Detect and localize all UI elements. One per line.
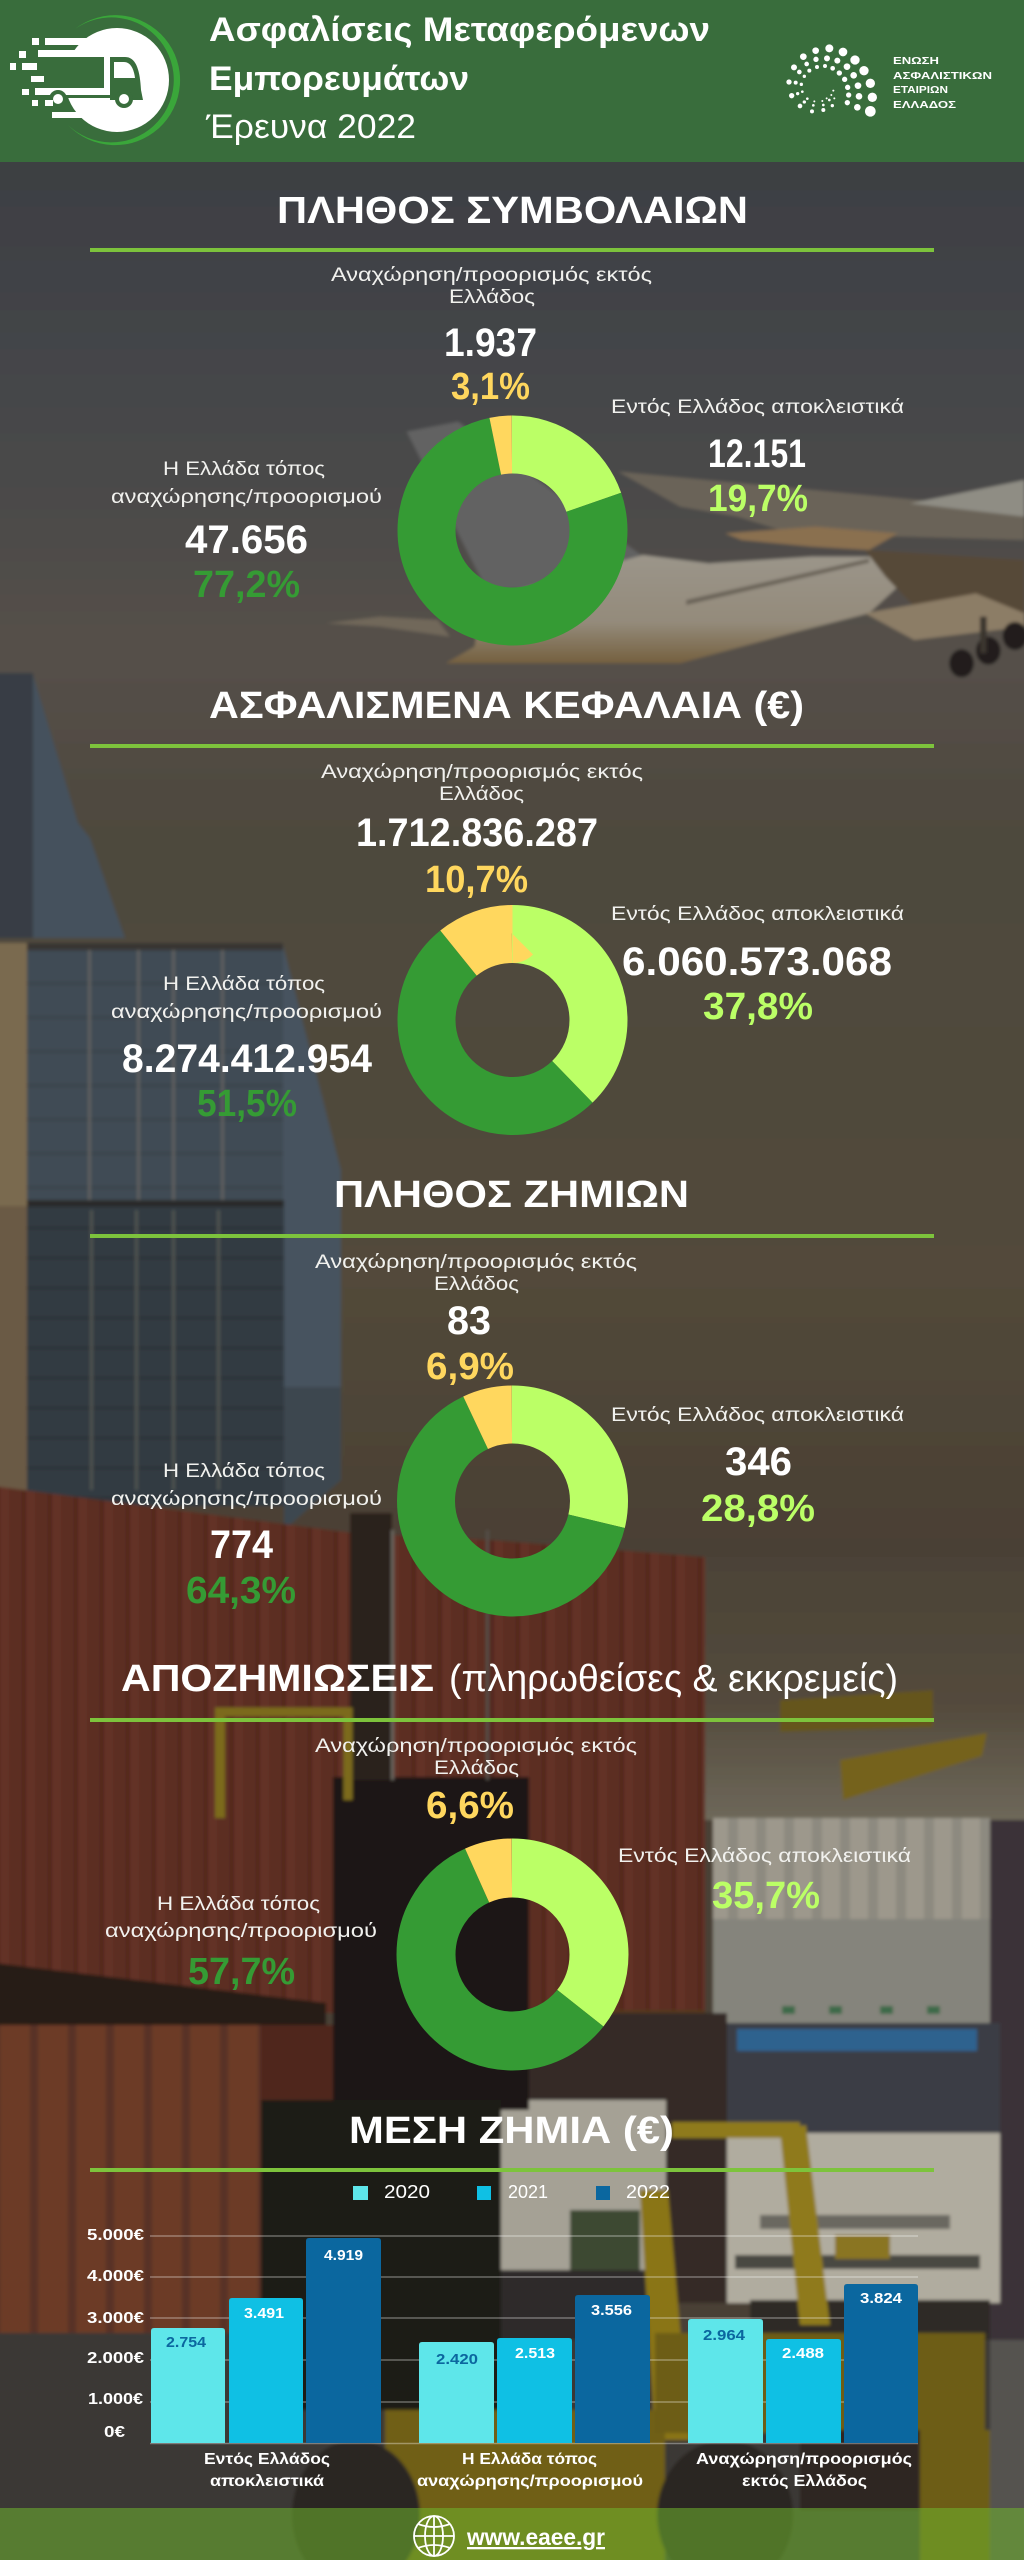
- label: Greece origin or destination: 774: [210, 1523, 274, 1567]
- header band: [0, 0, 1024, 162]
- label: Greece origin or destination: αναχώρησης/προορισμού: [111, 1002, 382, 1023]
- bars: Greece origin or destination: 2.513: [515, 2345, 555, 2362]
- label: outside Greece: 1.712.836.287: [356, 811, 598, 855]
- logo: ΕΑΕΕ dots and name: ΕΝΩΣΗ: [893, 56, 939, 67]
- label: Greece origin or destination: [111, 974, 382, 1125]
- heading: ΑΠΟΖΗΜΙΩΣΕΙΣ: [121, 1658, 434, 1700]
- label: Greece origin or destination: αναχώρησης/προορισμού: [111, 1489, 382, 1510]
- bars: outside Greece: 2.488: [782, 2345, 824, 2362]
- label: within Greece: [611, 397, 904, 520]
- bars: within Greece: 4.919: [324, 2247, 363, 2264]
- x axis labels: εκτός Ελλάδος: [742, 2473, 867, 2490]
- title: Ασφαλίσεις Μεταφερόμενων: [209, 11, 710, 49]
- bars: within Greece: 2.754: [166, 2334, 207, 2351]
- label: outside Greece: 10,7%: [425, 859, 528, 901]
- label: outside Greece: Αναχώρηση/προορισμός εκτός: [315, 1736, 637, 1757]
- second truck behind forklift: [496, 2100, 666, 2270]
- bar chart: [87, 2227, 918, 2490]
- bars: outside Greece: [688, 2284, 918, 2443]
- legend: [353, 2182, 670, 2202]
- website link: www.eaee.gr: [466, 2524, 605, 2550]
- logo: ΕΑΕΕ dots and name: ΕΤΑΙΡΙΩΝ: [893, 85, 948, 96]
- label: within Greece: 12.151: [708, 432, 806, 476]
- label: Greece origin or destination: Η Ελλάδα τόπος: [163, 974, 325, 995]
- label: within Greece: [611, 904, 904, 1028]
- label: outside Greece: [315, 1736, 637, 1827]
- label: within Greece: 37,8%: [703, 986, 813, 1028]
- heading: ΑΣΦΑΛΙΣΜΕΝΑ ΚΕΦΑΛΑΙΑ (€): [209, 685, 804, 727]
- donut chart: [426, 934, 598, 1106]
- label: within Greece: 19,7%: [708, 478, 808, 520]
- panel: ΑΣΦΑΛΙΣΜΕΝΑ ΚΕΦΑΛΑΙΑ: [90, 685, 934, 1125]
- label: outside Greece: 83: [447, 1299, 491, 1343]
- x axis labels: Εντός Ελλάδος: [204, 2451, 330, 2468]
- label: Greece origin or destination: 8.274.412.954: [122, 1037, 373, 1081]
- label: Greece origin or destination: [111, 459, 382, 606]
- label: outside Greece: Ελλάδος: [449, 287, 535, 308]
- label: within Greece: 28,8%: [701, 1488, 815, 1530]
- title: [205, 11, 710, 146]
- y axis labels: 5.000€: [87, 2227, 144, 2244]
- label: within Greece: [611, 1405, 904, 1530]
- red container: [0, 1483, 705, 2013]
- label: Greece origin or destination: αναχώρησης/προορισμού: [111, 487, 382, 508]
- logo: ΕΑΕΕ dots and name: ΑΣΦΑΛΙΣΤΙΚΩΝ: [893, 71, 992, 82]
- heading note: (πληρωθείσες & εκκρεμείς): [449, 1658, 898, 1700]
- label: Greece origin or destination: 77,2%: [193, 564, 300, 606]
- donut chart: [426, 1868, 599, 2041]
- footer band: [0, 2508, 1024, 2560]
- label: within Greece: Εντός Ελλάδος αποκλειστικά: [611, 1405, 904, 1426]
- y axis labels: 3.000€: [87, 2310, 144, 2327]
- label: Greece origin or destination: 51,5%: [197, 1083, 297, 1125]
- containers upper: [0, 673, 33, 938]
- heading: ΠΛΗΘΟΣ ΖΗΜΙΩΝ: [334, 1174, 689, 1216]
- label: within Greece: Εντός Ελλάδος αποκλειστικά: [618, 1846, 911, 1867]
- donut chart: [426, 444, 598, 616]
- y axis labels: 1.000€: [88, 2391, 143, 2408]
- label: within Greece: 346: [725, 1440, 792, 1484]
- heading: ΜΕΣΗ ΖΗΜΙΑ (€): [349, 2110, 674, 2152]
- label: within Greece: Εντός Ελλάδος αποκλειστικά: [611, 904, 904, 925]
- bars: Greece origin or destination: 3.556: [591, 2302, 632, 2319]
- panel: ΜΕΣΗ ΖΗΜΙΑ: [87, 2110, 934, 2490]
- label: outside Greece: [321, 762, 643, 901]
- label: outside Greece: Αναχώρηση/προορισμός εκτός: [315, 1252, 637, 1273]
- label: outside Greece: Ελλάδος: [434, 1758, 519, 1779]
- label: Greece origin or destination: αναχώρησης/προορισμού: [105, 1921, 377, 1942]
- bars: within Greece: [151, 2238, 381, 2443]
- logo: ΕΑΕΕ dots and name: [786, 44, 992, 117]
- right background: crane and white container: [705, 1557, 1024, 1820]
- bars: outside Greece: 2.964: [703, 2327, 746, 2344]
- heading: ΠΛΗΘΟΣ ΣΥΜΒΟΛΑΙΩΝ: [277, 190, 748, 232]
- x axis labels: αναχώρησης/προορισμού: [417, 2473, 643, 2490]
- icon: globe: [414, 2516, 454, 2556]
- label: outside Greece: [315, 1252, 637, 1388]
- bars: outside Greece: 3.824: [860, 2290, 903, 2307]
- label: Greece origin or destination: Η Ελλάδα τόπος: [163, 459, 325, 480]
- label: Greece origin or destination: Η Ελλάδα τόπος: [157, 1894, 320, 1915]
- title: Έρευνα 2022: [205, 108, 416, 146]
- y axis labels: 0€: [104, 2424, 125, 2441]
- label: within Greece: Εντός Ελλάδος αποκλειστικά: [611, 397, 904, 418]
- label: within Greece: 35,7%: [712, 1875, 820, 1917]
- label: Greece origin or destination: 57,7%: [188, 1951, 295, 1993]
- y axis labels: [87, 2227, 144, 2441]
- donut chart: [426, 1414, 599, 1588]
- label: outside Greece: Ελλάδος: [434, 1274, 519, 1295]
- label: Greece origin or destination: Η Ελλάδα τόπος: [163, 1461, 325, 1482]
- x axis labels: Αναχώρηση/προορισμός: [696, 2451, 912, 2468]
- legend: 2021: [508, 2182, 548, 2202]
- label: Greece origin or destination: 64,3%: [186, 1570, 296, 1612]
- label: outside Greece: 6,9%: [426, 1346, 514, 1388]
- panel: ΠΛΗΘΟΣ ΣΥΜΒΟΛΑΙΩΝ: [90, 190, 934, 616]
- label: outside Greece: 3,1%: [451, 366, 530, 408]
- label: outside Greece: 6,6%: [426, 1785, 514, 1827]
- title: Εμπορευμάτων: [209, 60, 469, 98]
- label: within Greece: 6.060.573.068: [622, 940, 892, 984]
- label: within Greece: [618, 1846, 911, 1917]
- label: Greece origin or destination: 47.656: [185, 518, 308, 562]
- panel: ΑΠΟΖΗΜΙΩΣΕΙΣ: [90, 1658, 934, 2041]
- bars: Greece origin or destination: 2.420: [436, 2351, 478, 2368]
- legend: 2020: [384, 2182, 430, 2202]
- label: outside Greece: 1.937: [444, 321, 537, 365]
- forklift: [333, 1777, 529, 2110]
- x axis labels: αποκλειστικά: [210, 2473, 324, 2490]
- label: outside Greece: Αναχώρηση/προορισμός εκτός: [321, 762, 643, 783]
- label: outside Greece: Ελλάδος: [439, 784, 524, 805]
- label: outside Greece: Αναχώρηση/προορισμός εκτός: [331, 265, 652, 286]
- logo: ΕΑΕΕ dots and name: ΕΛΛΑΔΟΣ: [893, 100, 956, 111]
- plane: [327, 422, 1024, 677]
- label: Greece origin or destination: [111, 1461, 382, 1612]
- y axis labels: 4.000€: [87, 2268, 144, 2285]
- label: Greece origin or destination: [105, 1894, 377, 1993]
- x axis labels: [204, 2451, 912, 2490]
- panel: ΠΛΗΘΟΣ ΖΗΜΙΩΝ: [90, 1174, 934, 1612]
- x axis labels: Η Ελλάδα τόπος: [462, 2451, 597, 2468]
- bars: within Greece: 3.491: [244, 2305, 284, 2322]
- bars: Greece origin or destination: [419, 2295, 650, 2443]
- legend: 2022: [626, 2182, 670, 2202]
- icon: truck logo: [10, 15, 180, 145]
- label: outside Greece: [331, 265, 652, 408]
- y axis labels: 2.000€: [87, 2350, 144, 2367]
